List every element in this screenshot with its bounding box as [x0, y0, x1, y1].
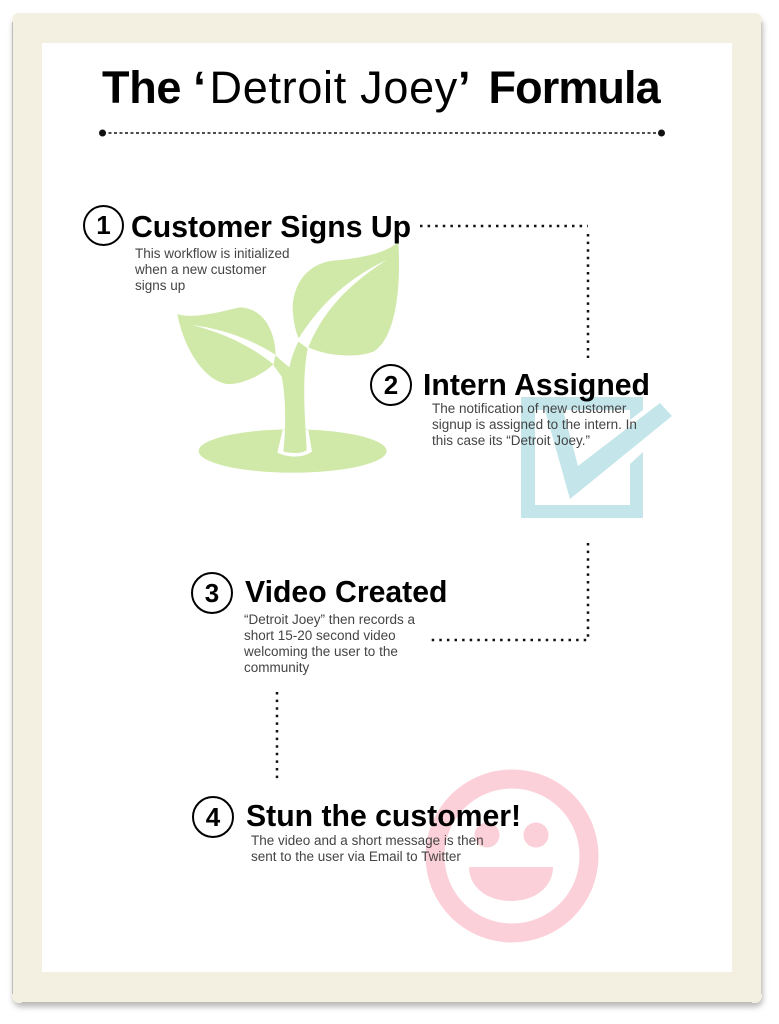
step 2 heading: Intern Assigned [423, 369, 650, 402]
step 1 text: when a new customer [135, 262, 266, 277]
step 2 number [370, 364, 412, 406]
step 1 text: signs up [135, 278, 185, 293]
step 3 number: 3 [205, 578, 219, 608]
step 4 heading: Stun the customer! [246, 800, 521, 833]
step 1 text [135, 246, 290, 293]
step 4 [192, 796, 521, 864]
step 3 text: community [244, 660, 309, 675]
step 1 heading: Customer Signs Up [131, 211, 411, 244]
step 2 [370, 364, 650, 448]
step 2 number: 2 [384, 370, 398, 400]
step 2 text: signup is assigned to the intern. In [432, 417, 637, 432]
step 1 number [83, 205, 124, 246]
step 2 text: this case its “Detroit Joey.” [432, 433, 590, 448]
title: The ‘Detroit Joey’ Formula [102, 62, 660, 113]
step 2 text [432, 401, 637, 448]
step 1 text: This workflow is initialized [135, 246, 290, 261]
step 3 text: short 15-20 second video [244, 628, 396, 643]
step 3 number [191, 572, 233, 614]
step 1 [83, 205, 411, 293]
step 4 number [192, 796, 234, 838]
step 3 text: “Detroit Joey” then records a [244, 612, 415, 627]
step 3 heading: Video Created [245, 576, 447, 609]
step 2 text: The notification of new customer [432, 401, 626, 416]
step 3 [191, 572, 447, 675]
step 3 text: welcoming the user to the [244, 644, 398, 659]
step 4 number: 4 [206, 802, 220, 832]
step 4 text: The video and a short message is then [251, 833, 484, 848]
step 1 number: 1 [96, 210, 111, 240]
step 3 text [244, 612, 415, 675]
step 4 text [251, 833, 484, 864]
step 4 text: sent to the user via Email to Twitter [251, 849, 461, 864]
